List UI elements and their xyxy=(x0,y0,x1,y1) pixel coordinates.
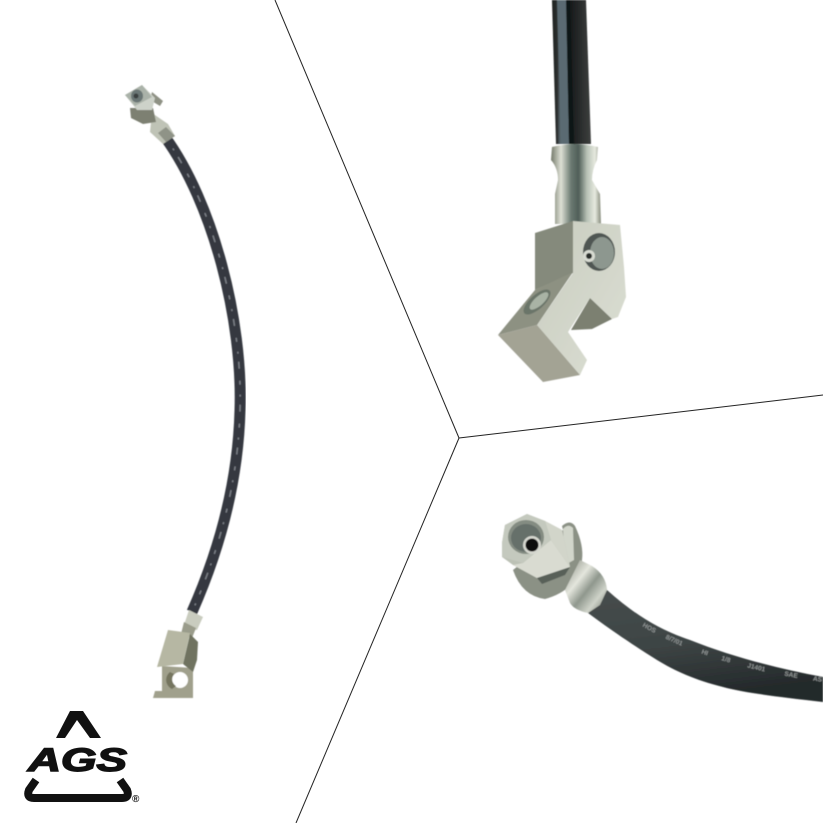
registered mark: ® xyxy=(132,794,140,805)
bracket rear face xyxy=(535,221,573,290)
bracket lower face xyxy=(498,325,580,382)
logo top chevron xyxy=(56,711,101,738)
threaded port xyxy=(583,233,615,271)
bracket slot interior xyxy=(571,298,612,330)
logo wordmark: AGS xyxy=(27,742,128,778)
bracket front face xyxy=(537,221,626,375)
top fitting xyxy=(125,85,175,144)
rubber hose with printed markings: HOS xyxy=(642,622,656,633)
bottom fitting xyxy=(153,610,203,698)
rubber hose with printed markings: AST xyxy=(812,676,822,682)
full view of brake hose xyxy=(125,85,240,698)
hex nut xyxy=(502,514,570,584)
hose body with markings xyxy=(165,137,240,612)
crimped ferrule xyxy=(551,144,601,224)
AGS logo xyxy=(27,711,140,805)
retaining clip xyxy=(513,522,582,599)
rubber hose with printed markings: J1401 xyxy=(746,662,765,672)
logo bottom bracket xyxy=(28,780,128,798)
rubber hose with printed markings: SAE xyxy=(784,670,798,679)
rubber hose with printed markings: HI xyxy=(701,648,709,656)
rubber hose section xyxy=(552,0,591,144)
divider lines between the three views xyxy=(275,0,823,823)
crimped ferrule xyxy=(565,560,607,613)
close-up: hose end with slotted bracket xyxy=(498,0,626,382)
bracket angled top with side hole xyxy=(498,272,573,335)
rubber hose with printed markings: 1/8 xyxy=(721,656,731,663)
rubber hose with printed markings: 8/7/01 xyxy=(665,634,683,646)
